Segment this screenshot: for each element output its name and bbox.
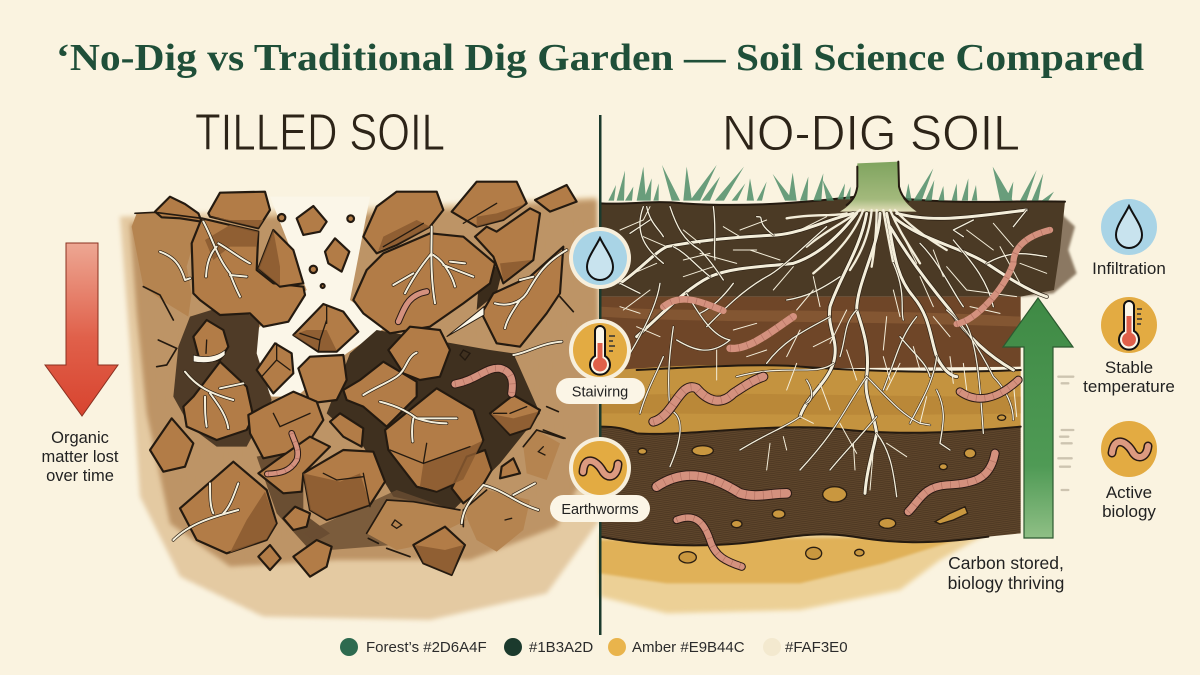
heading: tilled soil: TILLED SOIL bbox=[195, 104, 445, 162]
illustration: no-dig soil profile bbox=[600, 162, 1077, 613]
label pill: earthworms: Earthworms bbox=[561, 502, 639, 518]
text: carbon stored: biology thriving bbox=[948, 573, 1064, 593]
title: ‘No-Dig vs Traditional Dig Garden — Soil Science Compared bbox=[56, 37, 1144, 79]
root system bbox=[620, 207, 1047, 497]
text: carbon stored: Carbon stored, bbox=[948, 553, 1064, 573]
legend bbox=[340, 638, 848, 656]
text: organic matter lost: matter lost bbox=[41, 448, 119, 466]
legend: #FAF3E0 bbox=[785, 639, 848, 656]
label pill: staivirng bbox=[556, 378, 645, 404]
worms in tilled soil bbox=[267, 292, 512, 474]
center icon: worm bbox=[569, 437, 631, 499]
soil pebbles bbox=[638, 415, 1006, 563]
label: active biology: Active bbox=[1106, 483, 1152, 502]
label: active biology: biology bbox=[1102, 502, 1156, 521]
right icon: active biology bbox=[1101, 421, 1157, 477]
soil layers bbox=[1021, 203, 1077, 297]
label: infiltration: Infiltration bbox=[1092, 259, 1166, 278]
text: organic matter lost: Organic bbox=[51, 429, 109, 447]
center icon: water drop bbox=[569, 227, 631, 289]
legend: Forest’s #2D6A4F bbox=[366, 639, 487, 656]
label pill: earthworms bbox=[550, 495, 650, 522]
arrow: carbon stored bbox=[1003, 298, 1073, 538]
center icon: thermometer bbox=[569, 319, 631, 381]
scribbles right of arrow bbox=[1058, 377, 1073, 490]
right icon: infiltration bbox=[1101, 199, 1157, 255]
divider line bbox=[599, 115, 602, 635]
white roots in cracks bbox=[160, 222, 567, 540]
right icon: stable temperature bbox=[1101, 297, 1157, 353]
label: stable temperature: temperature bbox=[1083, 377, 1175, 396]
label pill: staivirng: Staivirng bbox=[572, 384, 628, 400]
stem bbox=[840, 162, 917, 212]
legend: #1B3A2D bbox=[529, 639, 593, 656]
label: stable temperature: Stable bbox=[1105, 358, 1153, 377]
grass bbox=[608, 165, 1054, 201]
text: organic matter lost: over time bbox=[46, 467, 114, 485]
illustration: tilled soil clods bbox=[120, 182, 600, 620]
legend: Amber #E9B44C bbox=[632, 639, 745, 656]
arrow: organic matter lost bbox=[45, 243, 118, 416]
pale amber subsoil bbox=[600, 530, 993, 613]
earthworms in living soil bbox=[653, 230, 1050, 567]
clods bbox=[132, 182, 577, 577]
heading: no-dig soil: NO-DIG SOIL bbox=[722, 105, 1020, 161]
clod shading bbox=[135, 203, 573, 574]
